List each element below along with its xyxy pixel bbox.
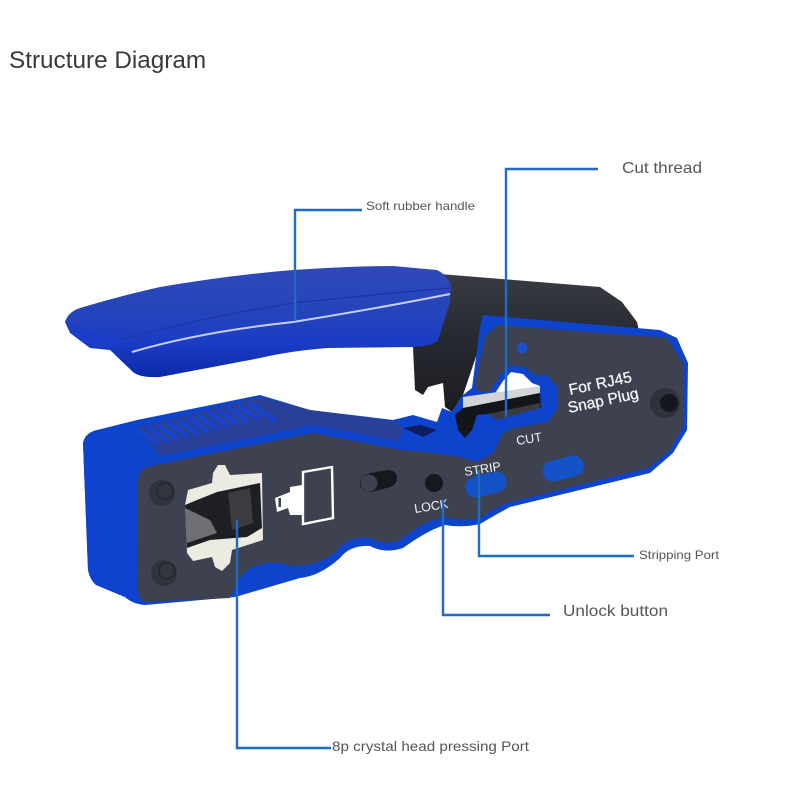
- slider: [360, 470, 397, 492]
- body top and side, blue: [83, 315, 688, 605]
- label: 8p port: 8p crystal head pressing Port: [332, 738, 529, 754]
- strip button: [463, 469, 509, 500]
- small blue dot: [516, 342, 528, 354]
- grip ridges: [139, 404, 275, 443]
- metal blade: [463, 386, 540, 408]
- engraved labels: STRIP: [463, 459, 502, 479]
- white gap in cutter: [464, 372, 540, 402]
- handle end tab: [70, 325, 120, 348]
- upper rivet: [149, 480, 175, 506]
- right rivet: [650, 388, 680, 418]
- leader: cut thread: [506, 169, 598, 417]
- tool: RJ45 crimper: [65, 266, 688, 605]
- port: opening: [185, 483, 262, 548]
- label: stripping port: Stripping Port: [639, 548, 720, 562]
- engraved labels: For RJ45: [567, 369, 633, 399]
- cut button: [540, 453, 586, 484]
- leader: 8p port: [237, 520, 331, 748]
- front dark plate: [138, 325, 683, 602]
- top face behind ridges: [137, 397, 403, 456]
- lock button: [425, 474, 443, 492]
- leader: soft rubber handle: [295, 210, 362, 321]
- leader: unlock button: [443, 500, 550, 615]
- body recess near jaw: [403, 425, 437, 437]
- label: cut thread: Cut thread: [622, 160, 702, 177]
- port: crimp block: [228, 488, 253, 530]
- black metal upper jaw: [413, 274, 640, 412]
- engraved labels: LOCK: [413, 497, 450, 516]
- leader: stripping port: [479, 470, 634, 556]
- engraved labels: CUT: [515, 430, 543, 448]
- dark inside of jaw: [455, 393, 541, 438]
- engraved labels: Snap Plug: [566, 385, 640, 417]
- label: unlock button: Unlock button: [563, 603, 668, 620]
- engraved labels: [413, 369, 640, 516]
- soft rubber handle: [65, 266, 451, 377]
- title: Structure Diagram: [9, 47, 206, 74]
- handle groove: [120, 288, 450, 340]
- lower rivet: [151, 560, 177, 586]
- port: white frame: [185, 465, 263, 571]
- body left face shading: [83, 430, 138, 602]
- icon: plug outline: [275, 467, 333, 524]
- handle highlight: [132, 294, 450, 352]
- cut thread slot: [488, 403, 540, 420]
- port: inner metal: [185, 508, 217, 543]
- label: soft rubber handle: Soft rubber handle: [366, 199, 475, 213]
